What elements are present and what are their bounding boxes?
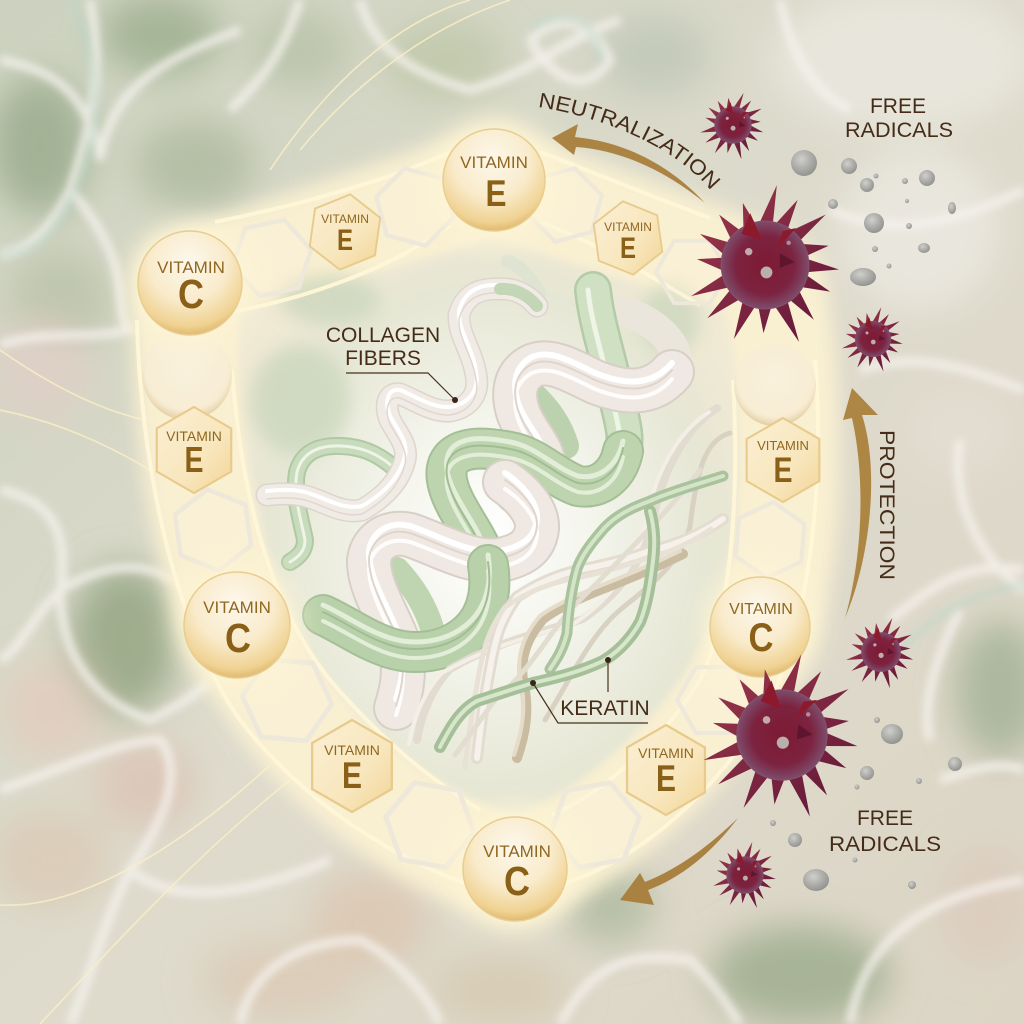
hexagon E 3: VITAMIN xyxy=(166,428,222,444)
small virus 3 xyxy=(843,611,920,692)
orb: vitamin C right: C xyxy=(748,616,774,660)
empty orbs xyxy=(142,330,816,426)
hexagon E 2 xyxy=(591,197,665,279)
free radicals top label: RADICALS xyxy=(845,119,953,142)
hexagon E 2: E xyxy=(620,232,636,265)
hexagon E 1: E xyxy=(337,224,353,257)
hexagon E 2: VITAMIN xyxy=(604,220,652,234)
hexagon E 6: E xyxy=(656,758,676,799)
vitamin orbs xyxy=(138,129,810,921)
large virus bottom xyxy=(699,647,865,820)
orb: vitamin E top: VITAMIN xyxy=(460,153,528,172)
heading: protection: PROTECTION xyxy=(875,430,898,580)
debris particles xyxy=(770,150,962,891)
orb: vitamin E top xyxy=(443,129,545,231)
heading: neutralization: NEUTRALIZATION xyxy=(540,93,720,190)
hexagon E 3 xyxy=(157,407,231,493)
label: keratin: KERATIN xyxy=(560,697,650,720)
orb: vitamin E top: E xyxy=(486,173,506,214)
left small helix xyxy=(267,261,540,562)
orb: vitamin C left top xyxy=(138,231,242,335)
hexagon E 3: E xyxy=(184,439,204,480)
small virus 4 xyxy=(712,839,778,909)
free radicals bottom label xyxy=(829,807,941,856)
hexagon E 1: VITAMIN xyxy=(321,212,369,226)
free radicals bottom label: FREE xyxy=(857,807,913,830)
hexagon E 6: VITAMIN xyxy=(638,745,694,761)
shield interior xyxy=(239,240,739,815)
arrow: protection xyxy=(843,388,878,618)
arrow: lower xyxy=(620,818,738,905)
hexagon E 4: VITAMIN xyxy=(757,438,809,453)
collagen fibers xyxy=(267,261,730,768)
orb: vitamin C bottom xyxy=(463,817,567,921)
arrow: neutralization xyxy=(552,124,705,203)
shield band xyxy=(137,152,818,885)
orb: vitamin C right xyxy=(710,577,810,677)
central helix xyxy=(323,290,678,715)
orb: vitamin C bottom: VITAMIN xyxy=(483,842,551,861)
label: collagen fibers: FIBERS xyxy=(345,347,421,370)
orb: vitamin C left xyxy=(184,572,290,678)
hexagon E 5: VITAMIN xyxy=(324,742,380,758)
hexagon E 5: E xyxy=(342,755,362,796)
vitamin E hexagons xyxy=(157,190,819,815)
small virus 2 xyxy=(840,304,906,373)
hexagon E 4: E xyxy=(774,451,792,490)
large virus top xyxy=(691,185,839,342)
hexagon E 6 xyxy=(627,725,705,815)
orb: vitamin C left top: VITAMIN xyxy=(157,258,225,277)
hexagon E 1 xyxy=(307,190,383,274)
orb: vitamin C left: VITAMIN xyxy=(203,598,271,617)
keratin strands xyxy=(409,408,730,768)
free radicals bottom label: RADICALS xyxy=(829,833,941,856)
hexagon E 4 xyxy=(747,418,819,502)
orb: vitamin C right: VITAMIN xyxy=(729,601,793,618)
label: collagen fibers: COLLAGEN xyxy=(326,324,440,347)
small virus 1 xyxy=(697,87,769,162)
label: collagen fibers xyxy=(326,324,458,403)
empty hexagon cells xyxy=(172,159,806,881)
hexagon E 5 xyxy=(312,720,392,812)
orb: vitamin C bottom: C xyxy=(504,858,530,904)
orb: vitamin C left: C xyxy=(225,615,251,661)
free radicals top label: FREE xyxy=(870,95,926,118)
orb glows xyxy=(130,120,816,929)
free radicals top label xyxy=(845,95,953,142)
orb: vitamin C left top: C xyxy=(178,271,204,317)
label: keratin xyxy=(530,657,650,723)
